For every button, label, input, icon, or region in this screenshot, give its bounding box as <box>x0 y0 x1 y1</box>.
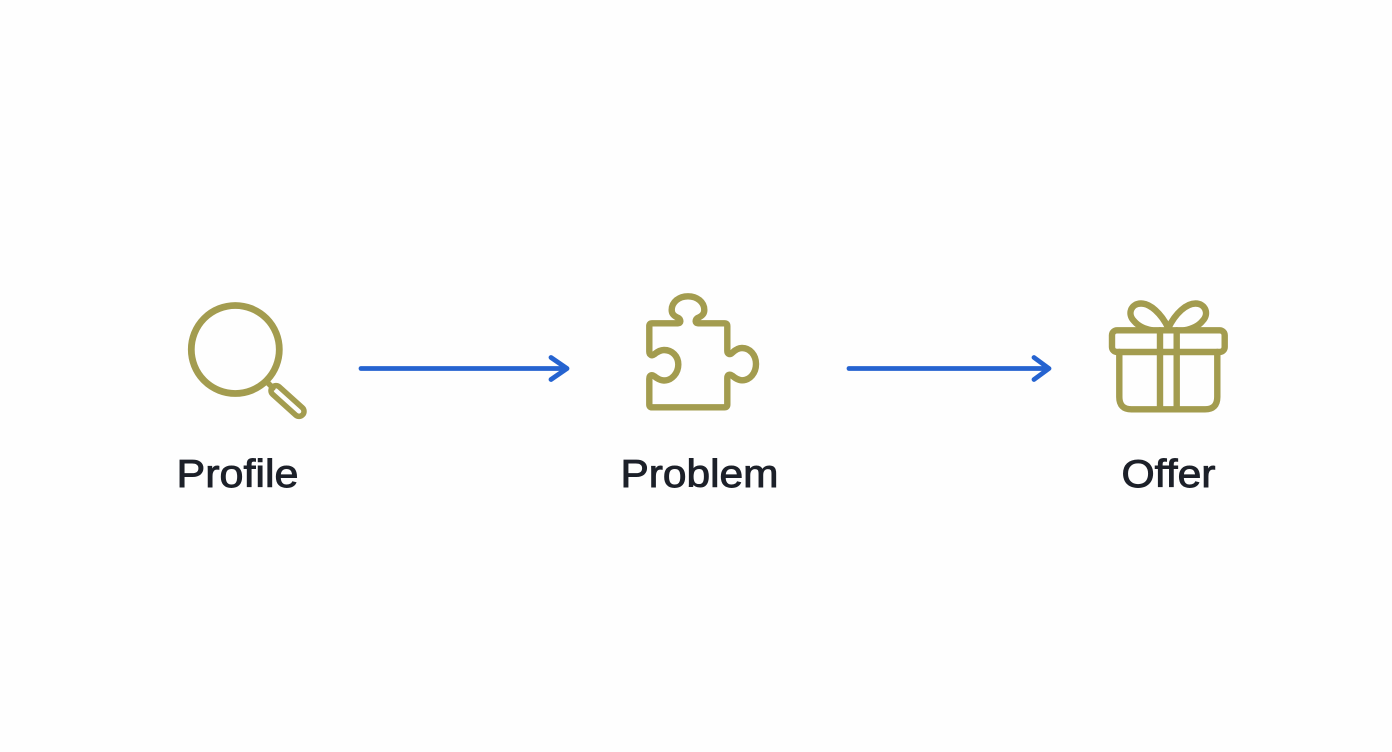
icon: magnifying glass <box>191 306 306 418</box>
label: Problem: Problem <box>620 453 778 496</box>
icon: puzzle piece <box>649 296 756 407</box>
label: Profile: Profile <box>176 453 298 496</box>
arrow: Profile to Problem <box>361 358 567 380</box>
icon: gift box <box>1112 304 1225 409</box>
step: Problem <box>620 296 778 496</box>
arrow: Problem to Offer <box>849 358 1049 380</box>
step: Offer <box>1112 304 1225 496</box>
step: Profile <box>176 306 306 496</box>
label: Offer: Offer <box>1122 453 1216 496</box>
